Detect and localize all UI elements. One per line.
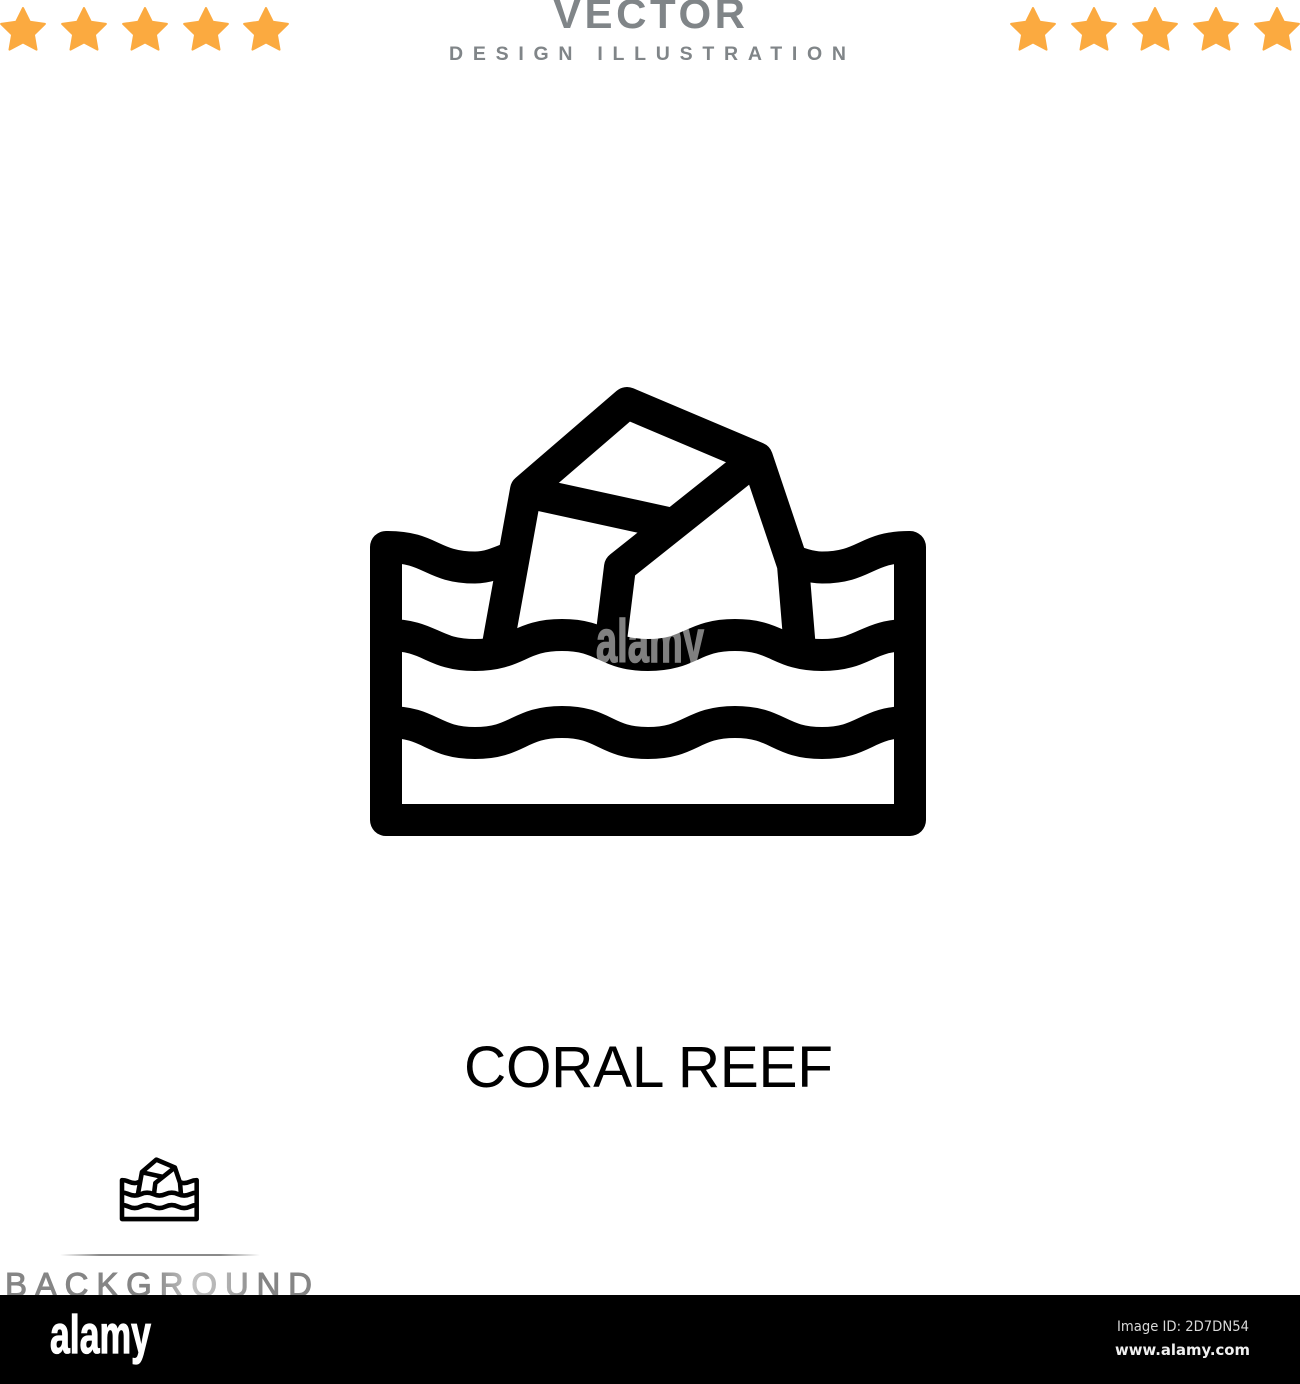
footer url: www.alamy.com — [1115, 1341, 1250, 1359]
icon: coral reef small — [122, 1160, 197, 1219]
footer logo: alamy: alamy — [50, 1305, 151, 1365]
icon: coral reef large — [386, 403, 910, 820]
frame and top wave — [386, 547, 910, 820]
footer image id: Image ID: 2D7DN54 — [1117, 1319, 1249, 1335]
right rating stars — [1011, 8, 1299, 50]
lower wave — [388, 722, 909, 743]
watermark: alamy over icon: alamy — [596, 608, 704, 675]
iceberg facet lines — [526, 458, 757, 640]
iceberg outline — [497, 403, 800, 650]
label: BACKGROUND: BACKGROUND — [5, 1266, 312, 1303]
middle wave — [388, 635, 909, 655]
footer bar — [0, 1295, 1300, 1384]
subheading: DESIGN ILLUSTRATION: DESIGN ILLUSTRATION — [449, 43, 846, 65]
title: CORAL REEF: CORAL REEF — [464, 1035, 833, 1100]
left rating stars — [1, 8, 288, 50]
